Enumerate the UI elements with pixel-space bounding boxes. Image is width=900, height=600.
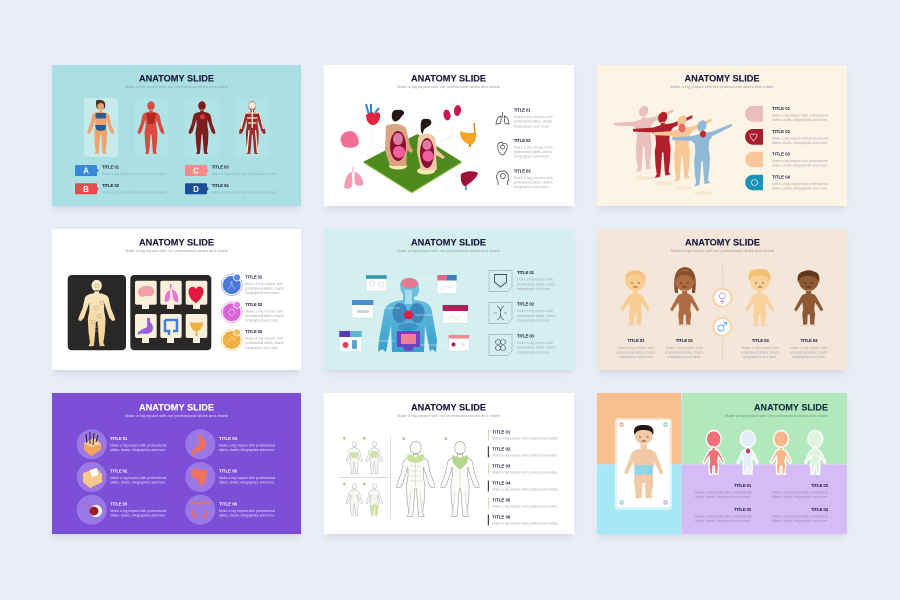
- icon: bladder: [460, 123, 476, 147]
- text block: right titles: slides, charts, infographics and more.: [219, 481, 275, 485]
- icon: kidneys: [442, 105, 462, 121]
- icon: head with brain outline: [497, 171, 509, 185]
- text block: titles 01-04: Make a big impact with professional slides: [102, 190, 167, 194]
- list: titles 01-06: Make a big impact with professional slides: [492, 504, 558, 508]
- heading: ANATOMY SLIDE: [139, 238, 215, 248]
- organ panel: [130, 275, 211, 350]
- text block: titles 01-03: infographics and more.: [514, 124, 550, 128]
- text block: titles 01-04: professional slides, charts,: [790, 351, 829, 355]
- heading: ANATOMY SLIDE: [684, 74, 760, 84]
- text block: titles 01-04: TITLE 04: [811, 507, 829, 512]
- text block: right titles: Make a big impact with professional: [219, 476, 275, 480]
- figure: skin layer: [84, 98, 118, 157]
- text block: right titles: TITLE 05: [219, 469, 238, 474]
- text block: titles 01-04: Make a big impact with: [742, 346, 779, 350]
- text block: titles 01-04: infographics and more.: [619, 355, 653, 359]
- card: teal window: [366, 275, 387, 291]
- card: coral window: [449, 335, 469, 351]
- text block: titles 01-04: TITLE 01: [772, 106, 791, 111]
- text block: titles 01-04: [772, 106, 828, 190]
- text block: titles 01-03: professional slides, charts,: [517, 346, 556, 350]
- heading: ANATOMY SLIDE: [411, 74, 487, 84]
- text block: titles 01-03: professional slides, charts,: [245, 287, 284, 291]
- text block: titles 01-04: TITLE 03: [752, 338, 769, 343]
- list: titles 01-06: TITLE 06: [492, 514, 511, 520]
- icon tile 04: [745, 175, 763, 190]
- heading: ANATOMY SLIDE: [685, 238, 761, 248]
- figure: outline child: [805, 431, 826, 474]
- list: titles 01-06: Make a big impact with professional slides: [492, 522, 558, 526]
- subtitle: Make a big impact with our professional slides and charts: [397, 249, 500, 253]
- isometric grass platform: [363, 134, 462, 194]
- text block: titles 01-03: professional slides, charts,: [514, 120, 553, 124]
- icon: heart: [189, 287, 204, 303]
- text block: titles 01-04: TITLE 04: [800, 338, 818, 343]
- icon: female symbol: [713, 289, 731, 307]
- text block: titles 01-03: TITLE 02: [514, 138, 531, 143]
- text block: left titles: TITLE 01: [110, 436, 128, 441]
- icon tile 02: [745, 129, 763, 145]
- text block: left titles: [110, 436, 167, 517]
- text block: titles 01-04: Make a big impact with: [666, 346, 703, 350]
- small figures: bottom row: [346, 484, 383, 516]
- subtitle: Make a big impact with our professional slides and charts: [125, 249, 228, 253]
- text block: titles 01-04: Make a big impact with professional: [772, 114, 828, 118]
- body panel: [68, 275, 126, 350]
- text block: titles 01-03: infographics and more.: [514, 185, 550, 189]
- badge D: [185, 183, 208, 194]
- icon: molecule box: [489, 334, 512, 356]
- text block: titles 01-04: TITLE 02: [772, 129, 791, 134]
- heading: ANATOMY SLIDE: [139, 402, 215, 414]
- heading: ANATOMY SLIDE: [139, 74, 215, 84]
- subtitle: Make a big impact with our professional slides and charts: [725, 414, 828, 418]
- text block: titles 01-04: Make a big impact with professional: [695, 490, 752, 494]
- subtitle: Make a big impact with our professional slides and charts: [397, 85, 500, 89]
- figure: circulatory layer: [188, 101, 216, 154]
- text block: titles 01-03: infographics and more.: [517, 287, 551, 291]
- text block: titles 01-03: infographics and more.: [517, 319, 551, 323]
- list: titles 01-06: Make a big impact with professional slides: [492, 470, 558, 474]
- text block: titles 01-04: professional slides, charts,: [741, 351, 780, 355]
- text block: titles 01-04: TITLE 02: [734, 507, 752, 512]
- text block: titles 01-04: professional slides, charts,: [665, 351, 704, 355]
- text block: right titles: TITLE 04: [219, 436, 238, 441]
- text block: titles 01-03: TITLE 03: [517, 333, 535, 338]
- card: blue window: [352, 300, 373, 318]
- figure: circulatory child: [737, 431, 758, 474]
- badge C: C: [193, 166, 199, 176]
- text block: titles 01-04: [616, 338, 829, 359]
- icon: skin and hair: [77, 429, 107, 459]
- badge D: D: [193, 185, 199, 194]
- text block: titles 01-03: Make a big impact with: [245, 309, 283, 313]
- figure: child 4: [794, 270, 823, 326]
- text block: titles 01-04: Make a big impact with professional: [772, 136, 828, 140]
- badge A: [75, 165, 98, 176]
- text block: titles 01-04: Make a big impact with professional slides: [212, 190, 277, 194]
- connector lines: [358, 125, 470, 178]
- dashed divider: [721, 265, 723, 360]
- text block: titles 01-04: infographics and more.: [743, 355, 777, 359]
- icon: lungs: [165, 284, 178, 302]
- icon: lungs outline: [496, 112, 509, 124]
- text block: right titles: slides, charts, infographics and more.: [219, 513, 275, 517]
- icon: heart: [366, 104, 380, 125]
- icon: brain: [138, 286, 154, 297]
- text block: titles 01-03: Make a big impact with: [517, 278, 553, 282]
- icon: liver: [461, 171, 478, 190]
- icon tile 01: [745, 106, 763, 122]
- text block: titles 01-04: slides, charts, infographics and more.: [772, 118, 828, 122]
- text block: titles 01-04: [695, 483, 829, 523]
- panel: slide 7 purple organ circles: [52, 393, 301, 534]
- text block: titles 01-03: TITLE 01: [514, 108, 531, 112]
- subtitle: Make a big impact with our professional slides and charts: [397, 414, 500, 418]
- text block: right titles: [219, 436, 275, 517]
- text block: titles 01-04: TITLE 01: [102, 164, 120, 170]
- panel: slide 9 colour blocks: [597, 393, 847, 534]
- text block: titles 01-04: Make a big impact with professional: [772, 159, 828, 163]
- text block: titles 01-03: TITLE 01: [517, 270, 535, 275]
- text block: left titles: TITLE 02: [110, 469, 128, 474]
- list: titles 01-06: TITLE 04: [492, 480, 511, 486]
- icon: stomach: [138, 318, 153, 335]
- text block: titles 01-04: Make a big impact with professional slides: [212, 172, 277, 176]
- text block: titles 01-03: Make a big impact with: [517, 309, 553, 313]
- floor shadows: [637, 176, 712, 195]
- text block: titles 01-03: infographics and more.: [245, 291, 279, 295]
- text block: titles 01-03: infographics and more.: [245, 346, 279, 350]
- slide shadows: [54, 69, 845, 537]
- text block: titles 01-03: Make a big impact with: [517, 341, 553, 345]
- text block: titles 01-04: Make a big impact with: [790, 346, 828, 350]
- text block: titles 01-03: Make a big impact with: [514, 115, 553, 119]
- figure: female torso: [417, 119, 445, 174]
- text block: right titles: Make a big impact with professional: [219, 444, 275, 448]
- text block: titles 01-03: TITLE 01: [245, 274, 263, 280]
- text block: titles 01-04: TITLE 03: [772, 152, 791, 157]
- text block: titles 01-03: infographics and more.: [245, 318, 279, 322]
- list: titles 01-06: [488, 429, 558, 526]
- text block: titles 01-03: TITLE 03: [514, 168, 531, 173]
- figure: blue layer: [672, 113, 732, 192]
- text block: titles 01-03: professional slides, charts,: [245, 341, 284, 345]
- icon: skin tissue: [77, 462, 107, 492]
- list: titles 01-06: TITLE 05: [492, 498, 511, 502]
- figure: male torso: [385, 110, 413, 170]
- text block: left titles: Make a big impact with professional: [110, 476, 167, 480]
- text block: titles 01-03: professional slides, charts,: [245, 314, 284, 318]
- text block: titles 01-04: Make a big impact with professional: [772, 514, 828, 518]
- connector lines: [361, 279, 449, 345]
- text block: right titles: TITLE 06: [219, 501, 238, 506]
- list: titles 01-06: Make a big impact with professional slides: [492, 453, 558, 457]
- panel: slide 5 human organs: [324, 229, 574, 370]
- text block: titles 01-03: Make a big impact with: [514, 146, 553, 150]
- heading: ANATOMY SLIDE: [411, 238, 487, 248]
- list: titles 01-06: TITLE 03: [492, 463, 511, 468]
- text block: titles 01-04: Make a big impact with: [618, 346, 655, 350]
- figure: child 1: [621, 270, 650, 326]
- icon: pink badge: [221, 301, 242, 323]
- text block: titles 01-03: Make a big impact with: [245, 337, 283, 341]
- text block: titles 01-04: slides, charts, infographics and more.: [695, 495, 751, 499]
- large figure: back: [441, 441, 479, 516]
- text block: titles 01-04: slides, charts, infographics and more.: [772, 186, 828, 190]
- panel: slide 8 muscle diagram: [324, 393, 574, 534]
- subtitle: Make a big impact with our professional slides and charts: [125, 414, 228, 418]
- text block: titles 01-03: Make a big impact with: [245, 282, 283, 286]
- icon: amber badge: [221, 329, 242, 350]
- text block: left titles: TITLE 03: [110, 501, 128, 506]
- text block: titles 01-03: [245, 274, 284, 350]
- text block: left titles: Make a big impact with professional: [110, 444, 167, 448]
- list: titles 01-06: Make a big impact with professional slides: [492, 436, 558, 440]
- text block: titles 01-04: slides, charts, infographics and more.: [772, 164, 828, 168]
- figure backing cards: [134, 98, 269, 157]
- badge B: [75, 183, 98, 194]
- text block: titles 01-03: TITLE 02: [245, 302, 263, 307]
- icon: intestines: [165, 320, 177, 335]
- figure: child 2: [670, 267, 699, 326]
- list: titles 01-06: Make a big impact with professional slides: [492, 488, 558, 492]
- text block: titles 01-04: TITLE 03: [811, 483, 829, 488]
- text block: left titles: slides, charts, infographics and more.: [110, 448, 166, 452]
- text block: left titles: slides, charts, infographics and more.: [110, 513, 166, 517]
- text block: titles 01-04: infographics and more.: [667, 355, 701, 359]
- grid dividers: [338, 436, 390, 518]
- text block: titles 01-04: professional slides, charts,: [616, 351, 656, 355]
- text block: titles 01-04: infographics and more.: [792, 355, 826, 359]
- panel: slide 2 isometric organs: [324, 65, 574, 206]
- text block: right titles: Make a big impact with professional: [219, 509, 275, 513]
- text block: right titles: slides, charts, infographics and more.: [219, 448, 275, 452]
- text block: titles 01-03: TITLE 03: [245, 329, 263, 334]
- text block: titles 01-04: TITLE 04: [212, 183, 229, 188]
- text block: titles 01-04: slides, charts, infographics and more.: [772, 519, 828, 523]
- text block: titles 01-03: infographics and more.: [514, 155, 550, 159]
- figure: muscle layer: [138, 101, 164, 154]
- panel: slide 6 children bodies: [597, 229, 847, 370]
- text block: titles 01-04: TITLE 03: [212, 164, 229, 170]
- small figures: top row: [346, 442, 383, 474]
- badge C: [185, 165, 208, 176]
- heading: ANATOMY SLIDE: [754, 402, 829, 414]
- list: titles 01-06: TITLE 01: [492, 429, 511, 434]
- subtitle: Make a big impact with our professional slides and charts: [125, 85, 228, 89]
- text block: titles 01-04: TITLE 02: [102, 183, 120, 188]
- figure: skeleton layer: [239, 101, 266, 154]
- icon: blue badge: [221, 274, 242, 296]
- text block: titles 01-03: Make a big impact with: [514, 176, 553, 180]
- icon: male symbol: [713, 318, 731, 336]
- panel: slide 4 organ cards: [52, 229, 301, 370]
- text block: titles 01-03: [514, 108, 553, 189]
- figure: orange layer: [652, 108, 712, 187]
- text block: left titles: slides, charts, infographics and more.: [110, 481, 166, 485]
- text block: titles 01-03: professional slides, charts,: [517, 282, 556, 286]
- heading: ANATOMY SLIDE: [411, 402, 487, 414]
- text block: titles 01-03: professional slides, charts,: [514, 150, 553, 154]
- card: purple window: [339, 331, 362, 352]
- text block: titles 01-03: [517, 270, 556, 354]
- icon: intestine: [185, 462, 215, 492]
- panel: slide 1 body layers: [52, 65, 301, 206]
- text block: titles 01-04: Make a big impact with professional slides: [102, 172, 167, 176]
- text block: titles 01-04: slides, charts, infographics and more.: [695, 519, 751, 523]
- list: titles 01-06: TITLE 02: [492, 446, 511, 451]
- card: crimson window: [443, 305, 468, 323]
- icon: bladder: [190, 322, 203, 336]
- icon: stomach: [185, 429, 215, 459]
- figure: pink layer: [614, 99, 673, 177]
- text block: titles 01-04: Make a big impact with professional: [772, 182, 828, 186]
- figure: skeleton child: [770, 431, 792, 474]
- figure: red layer: [633, 105, 692, 183]
- text block: titles 01-04: [102, 164, 277, 194]
- icon: DNA box: [489, 302, 512, 324]
- subtitle: Make a big impact with our professional slides and charts: [671, 249, 774, 253]
- icon: lungs: [344, 167, 364, 189]
- icon: reproductive organs: [185, 495, 215, 525]
- text block: left titles: Make a big impact with professional: [110, 509, 167, 513]
- large figure: front: [396, 441, 435, 516]
- text block: titles 01-04: Make a big impact with professional: [695, 514, 752, 518]
- icon: heart outline: [498, 142, 507, 155]
- icon: cell: [77, 495, 107, 525]
- text block: titles 01-04: TITLE 04: [772, 174, 791, 180]
- text block: titles 01-03: infographics and more.: [517, 350, 551, 354]
- text block: titles 01-03: professional slides, charts,: [514, 180, 553, 184]
- text block: titles 01-03: TITLE 02: [517, 302, 535, 307]
- panel: slide 3 T-pose layers: [597, 65, 847, 206]
- text block: titles 01-04: TITLE 01: [628, 338, 645, 343]
- card: pink and blue window: [437, 275, 457, 293]
- text block: titles 01-03: professional slides, charts,: [517, 314, 556, 318]
- icon: pink organ: [341, 131, 359, 148]
- text block: titles 01-04: TITLE 01: [734, 483, 752, 488]
- text block: titles 01-04: TITLE 02: [676, 338, 693, 343]
- torso figure: [378, 278, 437, 352]
- badge B: B: [83, 185, 89, 194]
- icon tile 03: [745, 152, 763, 167]
- card: boy: [615, 418, 672, 510]
- icon: shield box: [489, 270, 512, 292]
- text block: titles 01-04: Make a big impact with professional: [772, 490, 828, 494]
- text block: titles 01-04: slides, charts, infographics and more.: [772, 141, 828, 145]
- olive dots: [343, 437, 447, 485]
- figure: child 3: [745, 269, 774, 326]
- figure: muscle child: [703, 431, 724, 474]
- text block: titles 01-04: slides, charts, infographics and more.: [772, 495, 828, 499]
- subtitle: Make a big impact with our professional slides and charts: [670, 85, 774, 89]
- badge A: A: [83, 166, 89, 176]
